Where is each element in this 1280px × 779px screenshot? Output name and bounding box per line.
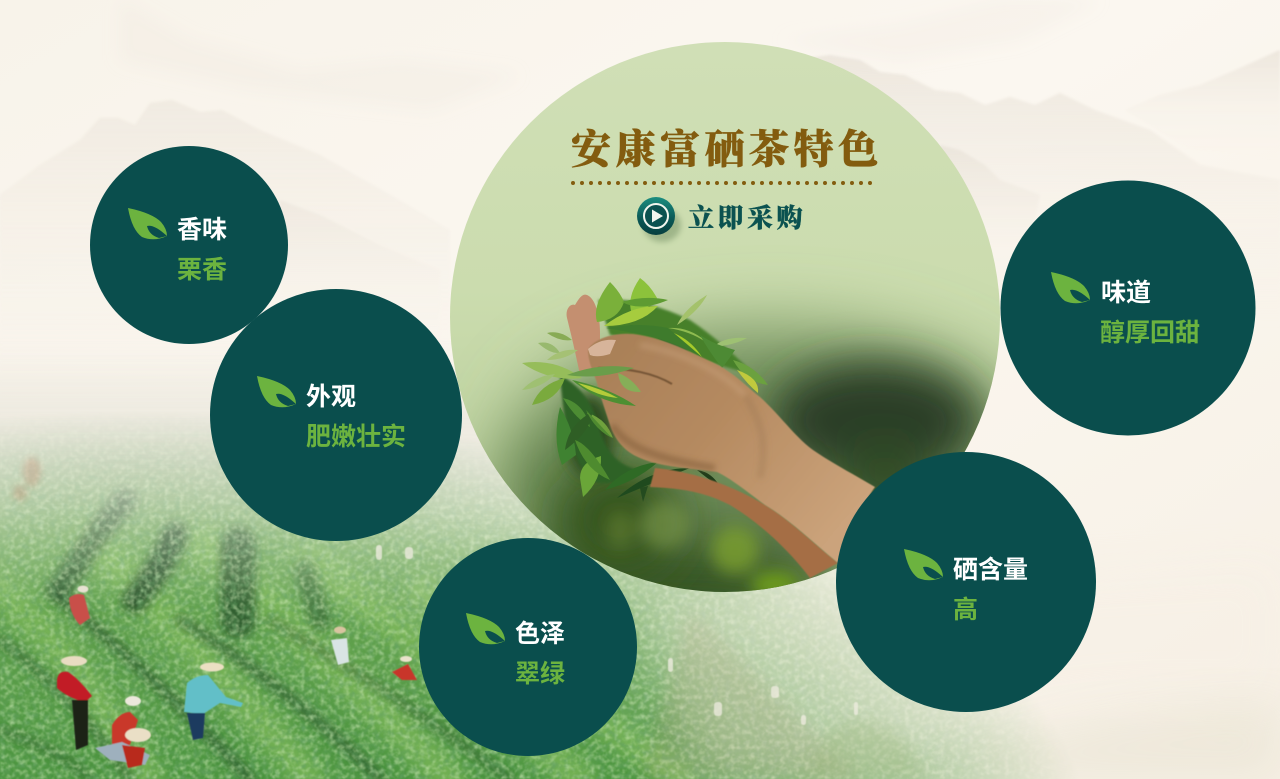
icon: leaf [466, 613, 505, 644]
dotted divider [573, 181, 876, 185]
label: 色泽 [515, 620, 565, 648]
photo: hand holding tea leaves [472, 278, 998, 592]
buy now link: 立即采购 [688, 204, 806, 233]
value: 高 [953, 596, 978, 624]
value: 醇厚回甜 [1100, 319, 1200, 347]
fog over distant field [640, 560, 1280, 779]
tea field photo [0, 421, 1062, 779]
mountains [0, 50, 1280, 420]
label: 味道 [1101, 279, 1151, 307]
picker: right red [392, 656, 417, 680]
tea pickers [13, 457, 858, 768]
icon: leaf [128, 208, 167, 239]
panel: 香味 [90, 146, 288, 344]
leaves behind hand [522, 278, 768, 502]
dark gaps between tea rows [0, 500, 510, 779]
leaves in front of hand [567, 325, 702, 438]
hand and arm [588, 334, 875, 563]
icon: leaf [1051, 272, 1090, 303]
icon: play button [637, 197, 681, 242]
icon: leaf [904, 549, 943, 580]
panel: main circle [450, 42, 1020, 650]
grey haze above field [0, 380, 580, 490]
icon: leaf [257, 376, 296, 407]
leaf texture dark [0, 493, 814, 779]
value: 栗香 [177, 256, 227, 284]
faint pickers [376, 545, 858, 725]
leaf texture light [0, 446, 1009, 779]
picker: teal shirt [184, 662, 243, 740]
thumbnail [588, 340, 616, 356]
faded red figures in fog [13, 457, 41, 501]
panel: 色泽 [419, 538, 637, 756]
panel: 外观 [210, 289, 462, 541]
distant hazy ridges [120, 0, 1100, 110]
panel: 味道 [1000, 180, 1256, 436]
main title: 安康富硒茶特色 [571, 127, 882, 172]
thumb crease [598, 368, 672, 384]
label: 硒含量 [953, 556, 1028, 584]
label: 香味 [177, 216, 227, 244]
forearm underside [650, 468, 838, 578]
palm shading [612, 345, 763, 478]
blurred garden backdrop [495, 330, 1020, 650]
light tea rows [0, 540, 680, 779]
value: 肥嫩壮实 [306, 423, 406, 451]
picker: red shirt [57, 656, 92, 750]
bokeh highlights [606, 501, 799, 599]
picker: crouching front [95, 696, 151, 768]
panel: 硒含量 [836, 452, 1096, 712]
picker: white shirt [331, 626, 349, 665]
label: 外观 [306, 383, 356, 411]
picker: upper left [69, 586, 90, 625]
value: 翠绿 [515, 660, 565, 688]
